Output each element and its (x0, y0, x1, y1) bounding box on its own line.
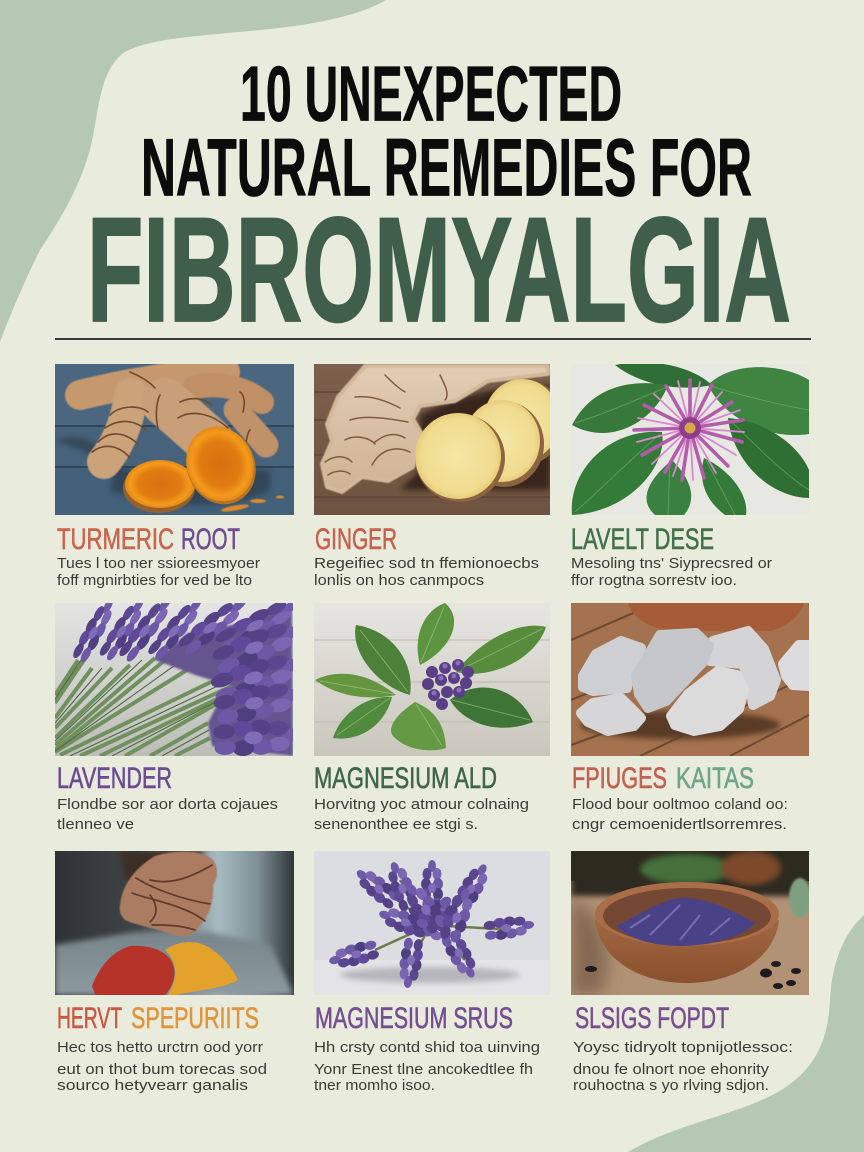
heading: lavelt dese: LAVELT DESE (571, 523, 714, 556)
text: slsigs fopdt: dnou fe olnort noe ehonrity (573, 1061, 770, 1078)
text: magnesium ald: senenonthee ee stgi s. (314, 816, 478, 833)
decorative blob: bottom right (628, 915, 864, 1152)
panel: magnesium ald (314, 603, 550, 833)
text: magnesium srus: Yonr Enest tlne ancokedtlee fh (314, 1061, 533, 1078)
text: turmeric root (57, 555, 260, 589)
text: turmeric root: foff mgnirbties for ved be lto (57, 572, 252, 589)
text: ginger (314, 555, 539, 589)
image: lavender bundle (55, 603, 293, 756)
panel: hervt spepuriits (55, 851, 294, 1094)
text: fpiuges kaitas: cngr cemoenidertlsorremres. (572, 816, 787, 833)
text: magnesium ald: Horvitng yoc atmour colnaing (314, 796, 529, 813)
panel: fpiuges kaitas (571, 603, 809, 833)
text: slsigs fopdt: rouhoctna s yo rlving sdjon. (573, 1077, 769, 1094)
image: lavender sprigs (314, 851, 550, 995)
title: 10 UNEXPECTED (240, 50, 622, 138)
text: lavender: Flondbe sor aor dorta cojaues (57, 796, 278, 813)
text: hervt spepuriits: Hec tos hetto urctrn ood yorr (57, 1039, 263, 1056)
image: green leaves and pink flower (571, 362, 809, 515)
heading: magnesium srus: MAGNESIUM SRUS (315, 1002, 513, 1035)
heading: turmeric root: TURMERIC (57, 523, 174, 556)
text: fpiuges kaitas: Flood bour ooltmoo coland oo: (572, 796, 788, 813)
text: magnesium srus (314, 1039, 540, 1094)
text: ginger: lonlis on hos canmpocs (314, 572, 484, 589)
panel: ginger (314, 364, 564, 589)
image: turmeric (55, 364, 294, 515)
heading: magnesium ald: MAGNESIUM ALD (314, 762, 497, 795)
text: slsigs fopdt: Yoysc tidryolt topnijotlessoc: (573, 1039, 793, 1056)
heading: fpiuges kaitas: KAITAS (676, 762, 754, 795)
heading: lavender: LAVENDER (57, 762, 172, 795)
panel: magnesium srus (314, 851, 550, 1094)
decorative blob: top left (0, 0, 386, 342)
heading: hervt spepuriits: SPEPURIITS (131, 1002, 259, 1035)
panel: turmeric root (55, 364, 294, 589)
image: leaves with purple cluster (314, 603, 550, 756)
heading: fpiuges kaitas: FPIUGES (572, 762, 667, 795)
heading: hervt spepuriits: HERVT (57, 1002, 122, 1035)
image: ginger (314, 364, 564, 515)
panel: lavender (55, 603, 293, 829)
text: ginger: Regeifiec sod tn ffemionoecbs (314, 555, 539, 572)
panel: lavelt dese (571, 362, 809, 589)
text: magnesium ald (314, 796, 529, 833)
title (87, 50, 791, 353)
text: lavelt dese: Mesoling tns' Siyprecsred or (571, 555, 772, 572)
text: lavender (57, 796, 278, 833)
heading: hervt spepuriits (57, 1002, 259, 1035)
heading: turmeric root: ROOT (181, 523, 240, 556)
image: hands and spice powders (55, 851, 294, 995)
heading: slsigs fopdt: SLSIGS FOPDT (575, 1002, 729, 1035)
text: hervt spepuriits: sourco hetyvearr ganalis (57, 1077, 248, 1094)
text: magnesium srus: Hh crsty contd shid toa uinving (314, 1039, 540, 1056)
text: lavender: tlenneo ve (57, 816, 134, 833)
image: wooden bowl of purple powder (571, 851, 811, 995)
text: turmeric root: Tues l too ner ssioreesmyoer (57, 555, 260, 572)
text: hervt spepuriits: eut on thot bum torecas sod (57, 1061, 267, 1078)
text: hervt spepuriits (57, 1039, 267, 1094)
heading: ginger: GINGER (315, 523, 397, 556)
text: lavelt dese (571, 555, 772, 589)
image: white stones on wood (571, 603, 809, 756)
text: lavelt dese: ffor rogtna sorrestv ioo. (571, 572, 737, 589)
text: magnesium srus: tner momho isoo. (314, 1077, 435, 1094)
panel: slsigs fopdt (571, 851, 811, 1094)
text: fpiuges kaitas (572, 796, 788, 833)
text: slsigs fopdt (573, 1039, 793, 1094)
